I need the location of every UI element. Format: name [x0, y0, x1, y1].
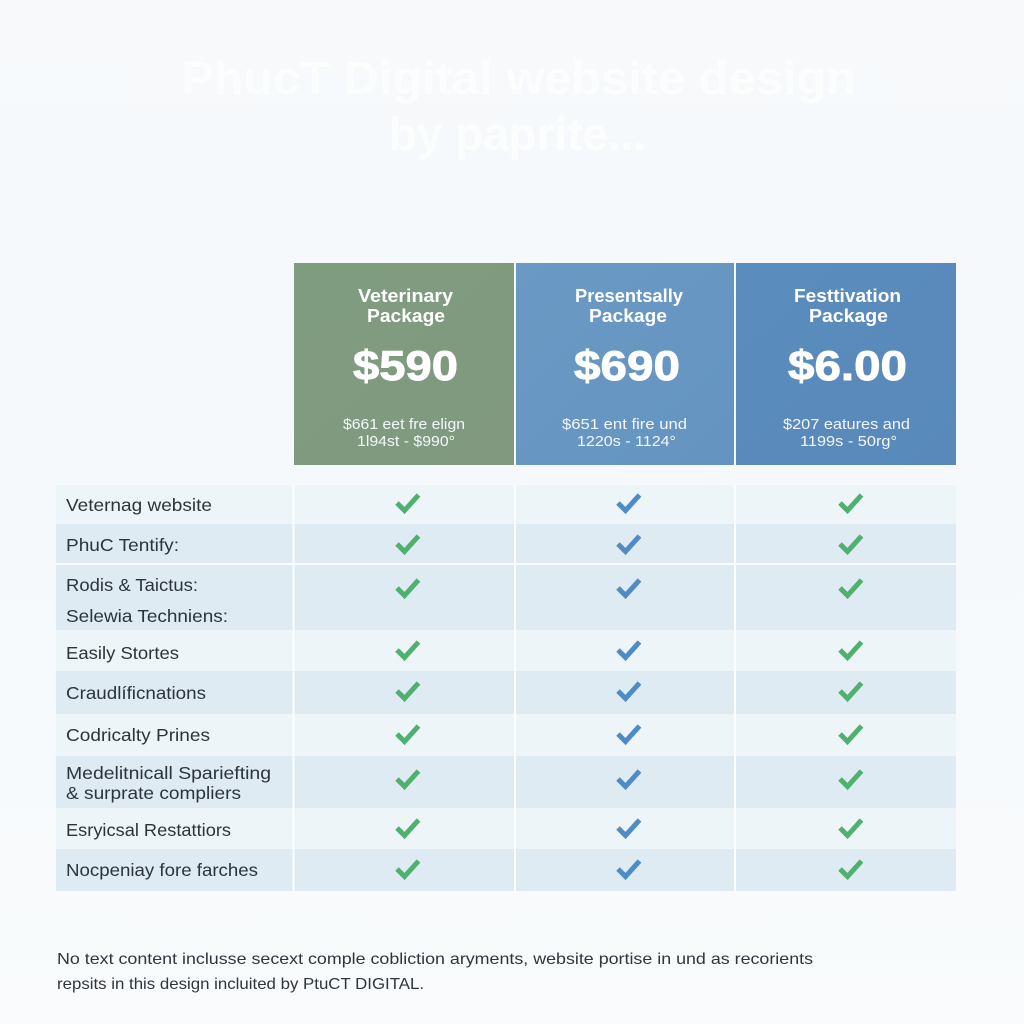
title: PhucT Digital website design: [181, 52, 856, 104]
panel: Presentsally Package header: $651 ent fire und: [562, 416, 687, 433]
panel: Veterinary Package header: Package: [367, 306, 445, 326]
panel: Veterinary Package header: 1l94st - $990°: [357, 433, 455, 450]
panel: Veterinary Package header: [294, 263, 514, 465]
row: Codricalty Prines: Codricalty Prines: [66, 725, 210, 745]
panel: Presentsally Package header: 1220s - 1124°: [577, 433, 676, 450]
row: Nocpeniay fore farches: [56, 849, 956, 891]
footer note: No text content inclusse secext comple cobliction aryments, website portise in und as recorients: [57, 951, 813, 968]
footer note: repsits in this design incluited by PtuCT DIGITAL.: [57, 976, 424, 993]
panel: Festtivation Package header: $6.00: [788, 342, 907, 389]
row: Craudlificnations: Craudlíficnations: [66, 683, 206, 703]
row: Easily Stortes: [56, 630, 956, 671]
panel: Festtivation Package header: Festtivation: [794, 286, 901, 306]
row: Veternag website: [56, 485, 956, 524]
row: PhuC Tentify: [56, 524, 956, 563]
panel: Veterinary Package header: Veterinary: [358, 286, 453, 306]
row: Rodis and Selewia: [56, 565, 956, 630]
title: by paprite...: [389, 108, 646, 160]
row: Nocpeniay fore farches: Nocpeniay fore farches: [66, 860, 258, 880]
panel: Presentsally Package header: [516, 263, 734, 465]
panel: Veterinary Package header: $590: [353, 342, 458, 389]
panel: Festtivation Package header: 1199s - 50rg°: [800, 433, 897, 450]
panel: Festtivation Package header: $207 eatures and: [783, 416, 910, 433]
panel: Veterinary Package header: $661 eet fre elign: [343, 416, 465, 433]
row: Rodis and Selewia: Rodis & Taictus:: [66, 575, 198, 595]
row: Esryicsal Restattiors: Esryicsal Restattiors: [66, 820, 231, 840]
row: Rodis and Selewia: Selewia Techniens:: [66, 606, 228, 626]
row: Codricalty Prines: [56, 714, 956, 756]
panel: Festtivation Package header: Package: [809, 306, 888, 326]
comparison table: [56, 485, 956, 891]
title: [181, 52, 856, 160]
panel: Presentsally Package header: $690: [574, 342, 680, 389]
row: PhuC Tentify: PhuC Tentify:: [66, 535, 179, 555]
panel: Presentsally Package header: Presentsally: [575, 286, 683, 306]
row: Veternag website: Veternag website: [66, 495, 212, 515]
row: Esryicsal Restattiors: [56, 808, 956, 849]
row: Medelitnicall Spariefting: [56, 756, 956, 808]
panel: Presentsally Package header: Package: [589, 306, 667, 326]
row: Easily Stortes: Easily Stortes: [66, 643, 179, 663]
panel: Festtivation Package header: [736, 263, 956, 465]
row: Medelitnicall Spariefting: Medelitnicall Spariefting: [66, 763, 271, 783]
row: Medelitnicall Spariefting: & surprate compliers: [66, 783, 241, 803]
footer note: [57, 951, 813, 993]
row: Craudlificnations: [56, 671, 956, 714]
